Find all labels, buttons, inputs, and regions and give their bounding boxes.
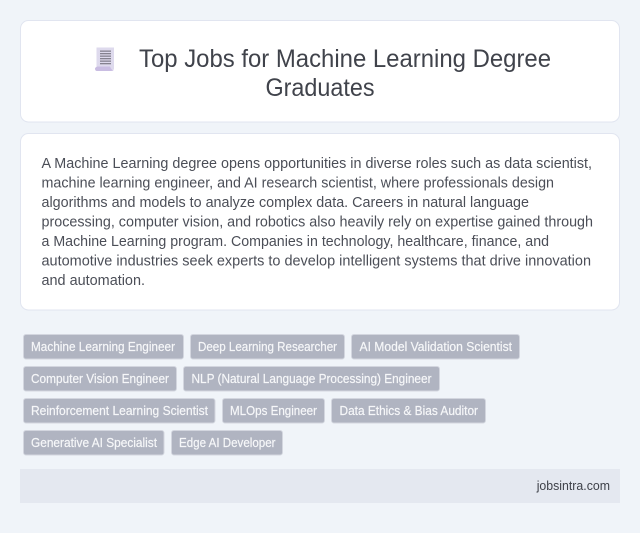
tag: Reinforcement Learning Scientist — [31, 404, 208, 418]
tag — [184, 366, 440, 391]
tag: Computer Vision Engineer — [31, 372, 169, 386]
tag: MLOps Engineer — [230, 404, 317, 418]
text block: description: a Machine Learning program. Companies in technology, healthcare, finance, and — [42, 234, 549, 250]
tag — [172, 430, 282, 455]
tag — [332, 398, 486, 423]
title — [139, 45, 551, 102]
tag — [352, 334, 520, 359]
tag — [24, 334, 184, 359]
tag — [24, 366, 176, 391]
tag — [222, 398, 324, 423]
tag: Edge AI Developer — [179, 436, 276, 450]
tag — [24, 398, 215, 423]
text block: description: and automation. — [42, 273, 145, 289]
footer bar — [20, 469, 620, 503]
tag: Machine Learning Engineer — [31, 340, 175, 354]
text block: description: automotive industries seek experts to develop intelligent systems that drive innovation — [42, 254, 591, 270]
tag: NLP (Natural Language Processing) Engineer — [192, 372, 432, 386]
title: Top Jobs for Machine Learning Degree — [139, 45, 551, 73]
icon: paper scroll document — [95, 48, 114, 71]
title: Graduates — [266, 74, 374, 102]
text block: description: processing, computer vision, and robotics also heavily rely on expertise gained through — [42, 214, 593, 230]
tag list — [24, 334, 520, 455]
footer source text: jobsintra.com — [536, 479, 610, 493]
tag: Generative AI Specialist — [31, 436, 157, 450]
panel: header — [20, 20, 620, 122]
text block: description: machine learning engineer, and AI research scientist, where professionals design — [42, 176, 554, 192]
text block: description: A Machine Learning degree opens opportunities in diverse roles such as data scientist, — [42, 156, 592, 172]
tag: AI Model Validation Scientist — [360, 340, 512, 354]
tag: Deep Learning Researcher — [198, 340, 337, 354]
tag — [24, 430, 164, 455]
text block: description — [42, 156, 593, 289]
panel: description — [20, 134, 620, 310]
tag — [190, 334, 344, 359]
tag: Data Ethics & Bias Auditor — [340, 404, 478, 418]
text block: description: algorithms and models to analyze complex data. Careers in natural language — [42, 195, 529, 211]
